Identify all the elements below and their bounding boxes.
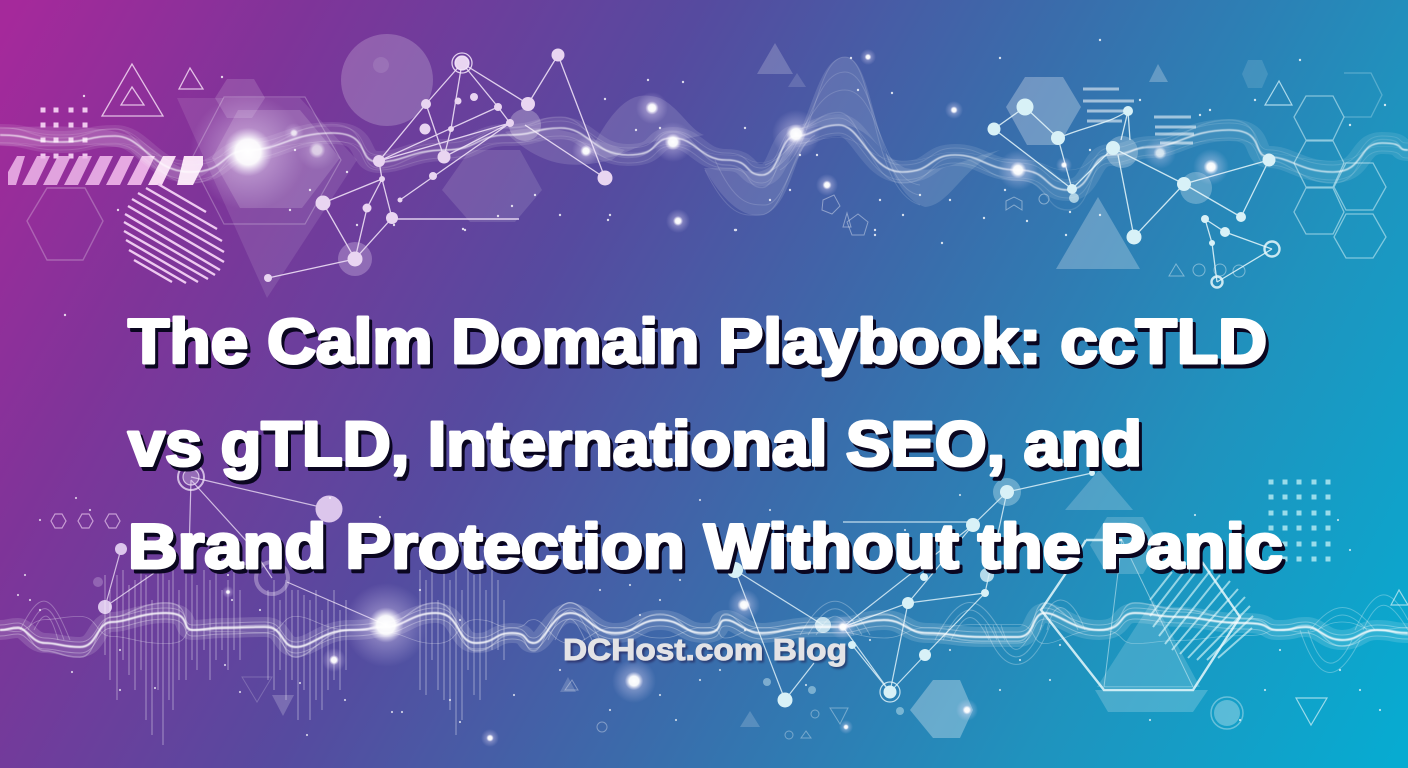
small outline shapes [822, 194, 1245, 277]
small hexagon outlines [51, 514, 120, 528]
big filled triangle [1056, 197, 1140, 269]
lower left links [105, 477, 386, 625]
filled hexagon behind title [1090, 517, 1160, 574]
filled triangle small [788, 73, 806, 87]
outline triangle outer [102, 64, 163, 116]
ringed node bottom [338, 242, 372, 276]
hexagon outline cluster [1294, 73, 1386, 258]
flare mid top [636, 92, 668, 124]
outline triangle upper right [1265, 81, 1292, 105]
hatched circle right [1150, 568, 1253, 660]
filled hexagon mid [442, 150, 542, 222]
ringed circle bottom right [1211, 697, 1243, 729]
diagonal stripe band [8, 156, 203, 185]
faint hexagon [1242, 60, 1268, 88]
filled hexagon [1006, 77, 1081, 145]
bottom geometric shapes [51, 470, 1408, 739]
outline triangle small [179, 68, 203, 89]
flare small left [297, 130, 337, 170]
large downward triangle [177, 98, 357, 298]
lower right nodes [727, 470, 1095, 715]
flare centre [772, 110, 820, 158]
wave mesh peak lines [705, 57, 920, 215]
filled hexagon centre [212, 110, 340, 208]
filled down triangle [272, 695, 294, 716]
wave thick translucent band [0, 125, 1408, 190]
dot grid right [1271, 482, 1328, 559]
filled hexagon upper [215, 79, 265, 118]
lower flares [344, 583, 428, 667]
lower right links [735, 473, 1092, 700]
bottom wave secondary lines [0, 603, 1408, 657]
title line 3: Brand Protection Without the Panic [128, 512, 1283, 582]
right network links [994, 107, 1272, 282]
bottom wave [0, 595, 1408, 672]
filled triangles top [757, 43, 793, 74]
filled hexagon bottom [1095, 690, 1208, 712]
wave mesh layers [0, 112, 1408, 210]
filled hexagon lower centre [910, 680, 973, 738]
glow flares [190, 49, 1229, 747]
subtitle: DCHost.com Blog [563, 632, 847, 667]
dot grid [43, 110, 85, 156]
ringed node top [452, 53, 472, 73]
wave bright line [0, 125, 1408, 190]
left network [264, 48, 612, 282]
filled triangle upper right [1149, 64, 1168, 82]
ringed node upper [178, 464, 204, 490]
audio spike lines [105, 560, 504, 745]
right network nodes [988, 98, 1276, 246]
down triangle outline [1296, 698, 1327, 725]
triangle outline inside hexagon [1104, 540, 1193, 687]
filled triangle in hexagon [1097, 600, 1200, 687]
outline hexagon bottom left [27, 188, 103, 260]
filled triangles mid bottom [560, 677, 576, 692]
bright hexagon outline [1041, 540, 1240, 690]
ring nodes [1212, 242, 1280, 288]
wave mesh fill shapes [0, 57, 1000, 215]
small circle in big circle [373, 57, 389, 73]
left network nodes [264, 48, 612, 282]
outline triangle inner [121, 87, 144, 105]
translucent node [509, 109, 541, 141]
main flare left [190, 94, 306, 210]
right network [988, 98, 1280, 288]
top left geometric shapes [8, 34, 542, 298]
bottom wave concentric lobes [20, 595, 1408, 672]
lower left network [93, 464, 386, 625]
top wave [0, 57, 1408, 215]
title line 2: vs gTLD, International SEO, and [128, 410, 1142, 480]
title line 1: The Calm Domain Playbook: ccTLD [128, 307, 1267, 377]
ringed node top [993, 478, 1021, 506]
lower left nodes [93, 496, 342, 614]
right edge triangle [1391, 590, 1408, 605]
ring node [256, 562, 288, 594]
hatched circle left [124, 184, 224, 283]
left network links [268, 55, 605, 278]
horizontal link [392, 218, 519, 220]
translucent circles [1106, 136, 1212, 204]
outline down triangle [242, 677, 272, 702]
filled triangle title right [1065, 470, 1133, 510]
top right geometric shapes [757, 43, 1386, 277]
big translucent circle [341, 34, 433, 126]
bottom wave bright line [0, 613, 1408, 647]
title [128, 307, 1283, 582]
ringed node bottom [880, 682, 900, 702]
small shapes bottom middle [565, 680, 848, 739]
lower right network [727, 470, 1095, 715]
outline hexagon large [191, 97, 341, 224]
bottom wave soft band [0, 613, 1408, 647]
text line bars [1083, 89, 1196, 143]
